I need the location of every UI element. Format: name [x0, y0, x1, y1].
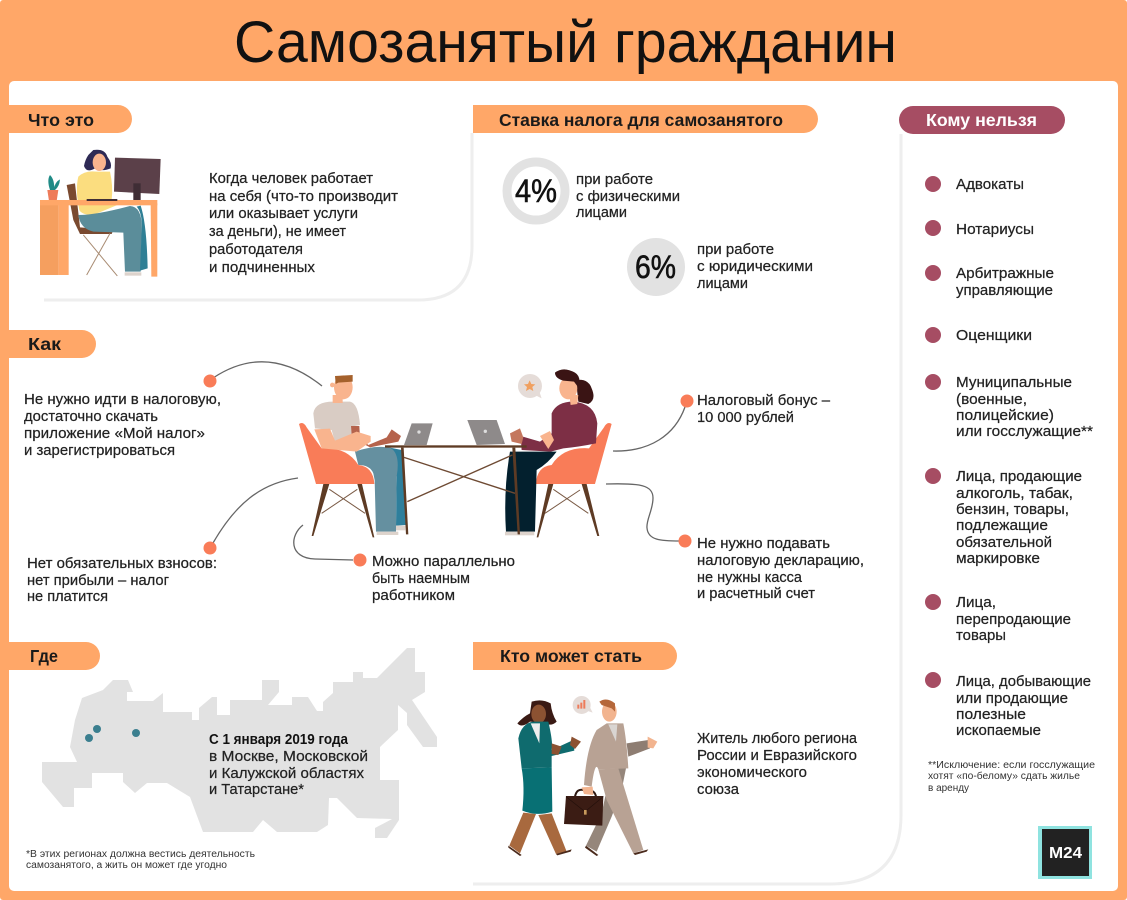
- rate 6%: с юридическими: [697, 259, 813, 275]
- text: who can become: союза: [697, 782, 740, 798]
- heading: who can become: [473, 642, 677, 670]
- text: where: [209, 732, 368, 798]
- text: where: в Москве, Московской: [209, 749, 368, 765]
- list: civil servants: полицейские): [956, 408, 1054, 424]
- footnote: exception: [928, 760, 1095, 794]
- callout: can also be employed: работником: [372, 588, 455, 604]
- heading: who is not allowed: Кому нельзя: [926, 110, 1037, 130]
- list: appraisers: [925, 327, 1032, 344]
- list: notaries: [925, 220, 1034, 238]
- text: what it is: [209, 171, 398, 276]
- list: civil servants: [925, 374, 1093, 440]
- list: arbitration managers: управляющие: [956, 283, 1053, 299]
- list: resellers: [925, 594, 1071, 644]
- text: what it is: и подчиненных: [209, 260, 316, 276]
- heading: who is not allowed: [899, 106, 1065, 134]
- logo: M24: М24: [1049, 845, 1082, 862]
- callout: no mandatory contributions: Нет обязательных взносов:: [27, 556, 217, 572]
- text: what it is: за деньги), не имеет: [209, 224, 346, 240]
- list: lawyers: Адвокаты: [956, 177, 1024, 193]
- list: sellers of regulated goods: маркировке: [956, 551, 1040, 567]
- text: who can become: [697, 731, 858, 798]
- heading: how: [9, 330, 96, 358]
- heading: tax rate: [473, 105, 818, 133]
- footnote: exception: в аренду: [928, 783, 969, 794]
- rate 6%: 6%: [635, 249, 676, 285]
- list: appraisers: Оценщики: [956, 328, 1032, 344]
- illustration: two people at a table: [299, 369, 612, 537]
- callout: no declaration: Не нужно подавать: [697, 536, 830, 552]
- list: resellers: перепродающие: [956, 612, 1071, 628]
- text: who can become: России и Евразийского: [697, 748, 857, 764]
- rate 4%: лицами: [576, 205, 627, 221]
- panel: who is not allowed: [899, 106, 1095, 794]
- list: civil servants: или госслужащие**: [956, 424, 1093, 440]
- text: where: С 1 января 2019 года: [209, 732, 349, 748]
- logo: M24: [1038, 826, 1092, 879]
- text: what it is: или оказывает услуги: [209, 206, 358, 222]
- callout: no tax office: приложение «Мой налог»: [24, 426, 205, 442]
- panel: tax rate: [473, 105, 818, 296]
- list: lawyers: [925, 176, 1024, 193]
- rate 6%: [627, 238, 813, 296]
- list: sellers of regulated goods: бензин, товары,: [956, 502, 1069, 518]
- list: mineral extractors: полезные: [956, 707, 1026, 723]
- list: sellers of regulated goods: Лица, продающие: [956, 469, 1082, 485]
- callout: no declaration: и расчетный счет: [697, 586, 815, 602]
- rate 4%: 4%: [515, 173, 557, 209]
- callout: tax bonus: Налоговый бонус –: [697, 393, 831, 409]
- rate 6%: при работе: [697, 242, 774, 258]
- callout: can also be employed: Можно параллельно: [372, 554, 515, 570]
- text: where: и Татарстане*: [209, 782, 304, 798]
- list: mineral extractors: Лица, добывающие: [956, 674, 1091, 690]
- heading: where: Где: [30, 646, 58, 666]
- rate 4%: [507, 162, 680, 221]
- list: sellers of regulated goods: алкоголь, табак,: [956, 486, 1073, 502]
- callout: can also be employed: быть наемным: [372, 571, 470, 587]
- footnote: regions: самозанятого, а жить он может где угодно: [26, 860, 227, 871]
- text: who can become: Житель любого региона: [697, 731, 858, 747]
- illustration: two walking people: [508, 696, 657, 856]
- callout: no declaration: не нужны касса: [697, 570, 803, 586]
- list: civil servants: Муниципальные: [956, 375, 1072, 391]
- callout: no mandatory contributions: [27, 478, 298, 605]
- list: sellers of regulated goods: [925, 468, 1082, 567]
- heading: what it is: Что это: [28, 110, 94, 130]
- panel: how: [9, 330, 864, 605]
- list: notaries: Нотариусы: [956, 222, 1034, 238]
- text: where: и Калужской областях: [209, 766, 365, 782]
- text: what it is: Когда человек работает: [209, 171, 373, 187]
- list: civil servants: (военные,: [956, 392, 1027, 408]
- illustration: woman at computer: [40, 150, 161, 277]
- callout: can also be employed: [294, 525, 515, 604]
- heading: who can become: Кто может стать: [500, 646, 642, 666]
- panel: where: [9, 642, 437, 871]
- callout: tax bonus: [613, 393, 831, 451]
- rate 6%: лицами: [697, 276, 748, 292]
- panel: what it is: [9, 105, 398, 277]
- footnote: exception: **Исключение: если госслужащие: [928, 760, 1095, 771]
- list: mineral extractors: [925, 672, 1091, 739]
- text: what it is: работодателя: [209, 242, 303, 258]
- callout: no declaration: налоговую декларацию,: [697, 553, 864, 569]
- panel: who can become: [473, 642, 858, 856]
- callout: tax bonus: 10 000 рублей: [697, 410, 794, 426]
- callout: no mandatory contributions: не платится: [27, 589, 108, 605]
- list: resellers: Лица,: [956, 595, 996, 611]
- heading: what it is: [9, 105, 132, 133]
- rate 4%: с физическими: [576, 189, 680, 205]
- footnote: regions: [26, 849, 255, 871]
- title: Самозанятый гражданин: [234, 10, 897, 75]
- heading: tax rate: Ставка налога для самозанятого: [499, 110, 783, 130]
- list: resellers: товары: [956, 628, 1006, 644]
- footnote: regions: *В этих регионах должна вестись деятельность: [26, 849, 255, 860]
- callout: no tax office: [24, 362, 322, 459]
- heading: where: [9, 642, 100, 670]
- callout: no tax office: Не нужно идти в налоговую,: [24, 392, 221, 408]
- list: arbitration managers: [925, 265, 1054, 299]
- text: what it is: на себя (что-то производит: [209, 189, 398, 205]
- callout: no mandatory contributions: нет прибыли – налог: [27, 573, 169, 589]
- list: sellers of regulated goods: подлежащие: [956, 518, 1048, 534]
- list: arbitration managers: Арбитражные: [956, 266, 1054, 282]
- text: who can become: экономического: [697, 765, 807, 781]
- callout: no tax office: и зарегистрироваться: [24, 443, 175, 459]
- list: mineral extractors: или продающие: [956, 691, 1068, 707]
- callout: no tax office: достаточно скачать: [24, 409, 158, 425]
- map of Russia: [42, 648, 437, 838]
- footnote: exception: хотят «по-белому» сдать жилье: [928, 770, 1080, 782]
- list: sellers of regulated goods: обязательной: [956, 535, 1052, 551]
- list: mineral extractors: ископаемые: [956, 723, 1041, 739]
- rate 4%: при работе: [576, 172, 653, 188]
- heading: how: Как: [28, 334, 61, 354]
- callout: no declaration: [606, 484, 864, 602]
